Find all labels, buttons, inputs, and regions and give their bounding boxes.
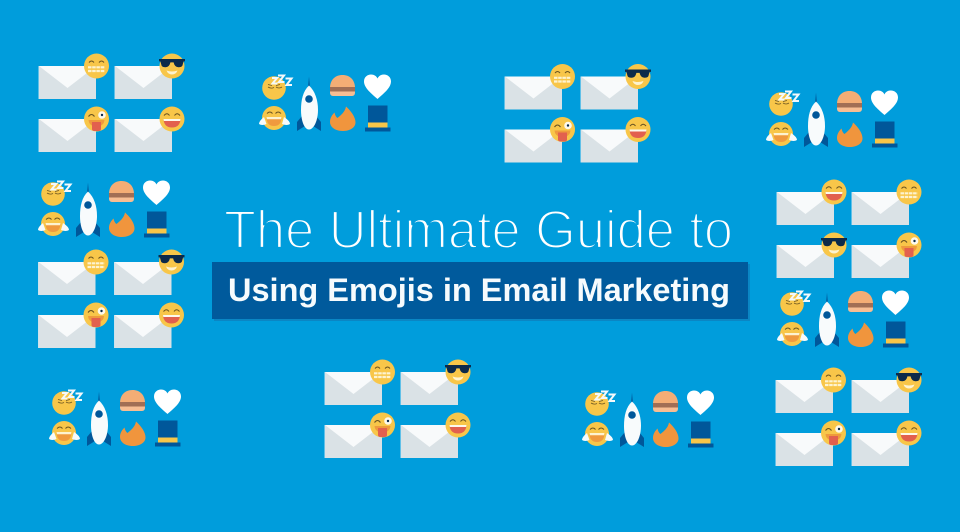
envelope cluster: middle left xyxy=(38,250,184,348)
envelope cluster: bottom right xyxy=(776,368,922,466)
title: The Ultimate Guide to xyxy=(224,200,733,260)
emoji cluster: bottom left xyxy=(49,390,181,446)
envelope cluster: bottom centre xyxy=(324,360,471,458)
emoji cluster: top xyxy=(259,74,391,132)
subtitle text: Using Emojis in Email Marketing xyxy=(228,272,730,308)
envelope cluster: middle right xyxy=(776,180,922,278)
subtitle banner xyxy=(212,262,750,321)
emoji cluster: left xyxy=(38,180,170,238)
emoji cluster: top right xyxy=(766,90,898,148)
emoji cluster: right xyxy=(777,290,909,348)
envelope cluster: top centre xyxy=(504,64,651,162)
envelope cluster: top left xyxy=(38,54,185,152)
emoji cluster: bottom centre right xyxy=(582,390,714,448)
